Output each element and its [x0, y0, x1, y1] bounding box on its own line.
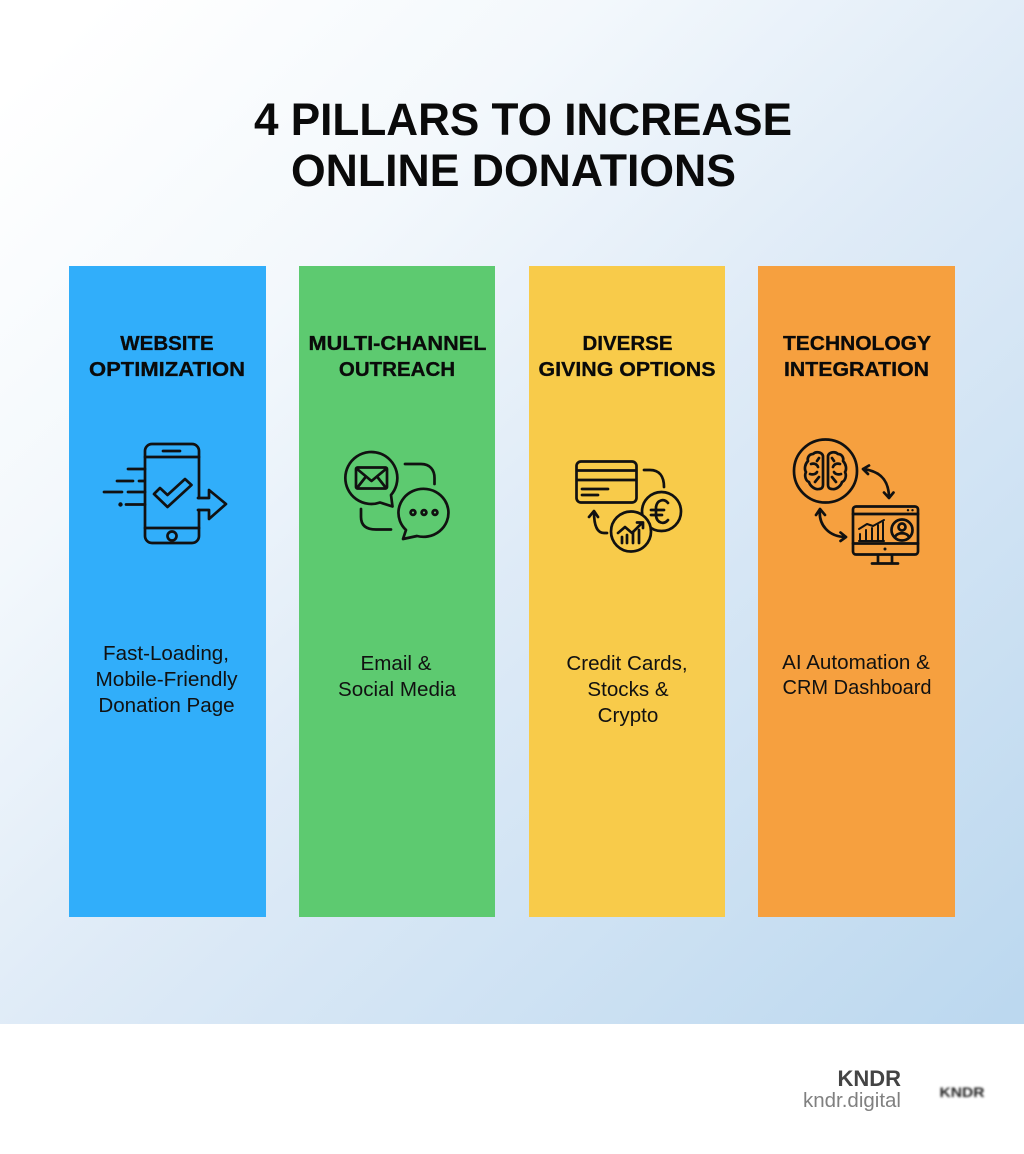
icon: email and chat bubbles — [345, 452, 448, 539]
footer brand: KNDR — [837, 1066, 901, 1091]
description: multi-channel outreach: Social Media — [338, 678, 456, 701]
title: ONLINE DONATIONS — [291, 145, 736, 196]
panel: multi-channel outreach — [299, 266, 495, 917]
heading: multi-channel outreach — [308, 332, 486, 381]
heading: multi-channel outreach: OUTREACH — [339, 358, 455, 381]
heading: website optimization: OPTIMIZATION — [89, 358, 245, 381]
description: website optimization — [96, 642, 238, 717]
description: technology integration: AI Automation & — [782, 651, 930, 674]
footer brand — [803, 1066, 901, 1112]
description: diverse giving options: Stocks & — [587, 678, 669, 701]
description: website optimization: Fast-Loading, — [103, 642, 229, 665]
title: 4 PILLARS TO INCREASE — [254, 94, 792, 145]
description: technology integration — [782, 651, 932, 699]
heading: technology integration: TECHNOLOGY — [783, 332, 931, 355]
description: technology integration: CRM Dashboard — [782, 676, 932, 699]
title — [254, 94, 792, 196]
heading: diverse giving options: GIVING OPTIONS — [538, 358, 716, 381]
description: diverse giving options: Crypto — [598, 704, 658, 727]
panel: technology integration — [758, 266, 955, 917]
heading: technology integration: INTEGRATION — [784, 358, 929, 381]
description: multi-channel outreach: Email & — [361, 652, 432, 675]
icon: card, euro coin and stocks coin — [576, 462, 681, 552]
description: website optimization: Donation Page — [98, 694, 235, 717]
footer logo: KNDR — [940, 1084, 984, 1100]
description: website optimization: Mobile-Friendly — [96, 668, 238, 691]
heading: diverse giving options: DIVERSE — [582, 332, 672, 355]
heading: technology integration — [783, 332, 931, 381]
heading: website optimization: WEBSITE — [120, 332, 214, 355]
description: diverse giving options: Credit Cards, — [566, 652, 688, 675]
description: multi-channel outreach — [338, 652, 456, 701]
panel: website optimization — [69, 266, 266, 917]
heading: diverse giving options — [538, 332, 716, 381]
heading: multi-channel outreach: MULTI-CHANNEL — [308, 332, 486, 355]
icon: brain and CRM dashboard — [794, 440, 918, 564]
heading: website optimization — [89, 332, 245, 381]
description: diverse giving options — [566, 652, 688, 727]
footer brand: kndr.digital — [803, 1089, 901, 1112]
icon: phone with check and arrow — [104, 444, 226, 543]
panel: diverse giving options — [529, 266, 725, 917]
